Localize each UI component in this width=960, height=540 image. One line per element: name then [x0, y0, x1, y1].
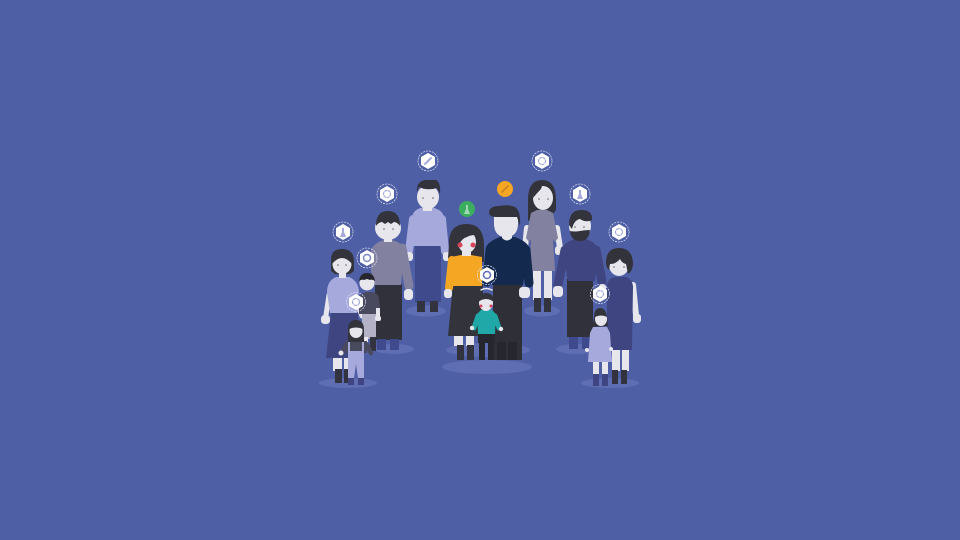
girl in lilac overalls	[338, 320, 371, 385]
man in lilac sweater	[405, 180, 450, 316]
icon: green flask hexagon	[459, 201, 475, 217]
child in teal sweater	[470, 288, 503, 360]
icon: flask hexagon left	[333, 222, 353, 242]
icon: dna hexagon left	[346, 292, 366, 312]
icon: molecule hexagon top right	[532, 151, 552, 171]
child in grey tee	[359, 273, 381, 351]
icon: atom hexagon left	[357, 248, 377, 268]
man in navy sweater	[486, 205, 530, 360]
woman in grey dress	[524, 180, 563, 316]
woman in yellow sweater	[444, 224, 484, 360]
icon: molecule hexagon left	[377, 184, 397, 204]
bearded man in indigo sweater	[553, 210, 606, 354]
icon: dna hexagon right	[609, 222, 629, 242]
shadows: front centre pair	[442, 343, 532, 374]
man in grey sweater	[371, 211, 414, 354]
icon: orange syringe hexagon	[497, 181, 513, 197]
woman in indigo dress	[581, 248, 641, 388]
woman in lilac top and indigo skirt	[319, 249, 377, 388]
girl in lilac dress	[585, 308, 613, 386]
icon: molecule hexagon lower right	[590, 284, 610, 304]
icon: syringe hexagon	[418, 151, 438, 171]
icon: atom hexagon centre	[478, 266, 496, 284]
icon: flask hexagon right	[570, 184, 590, 204]
